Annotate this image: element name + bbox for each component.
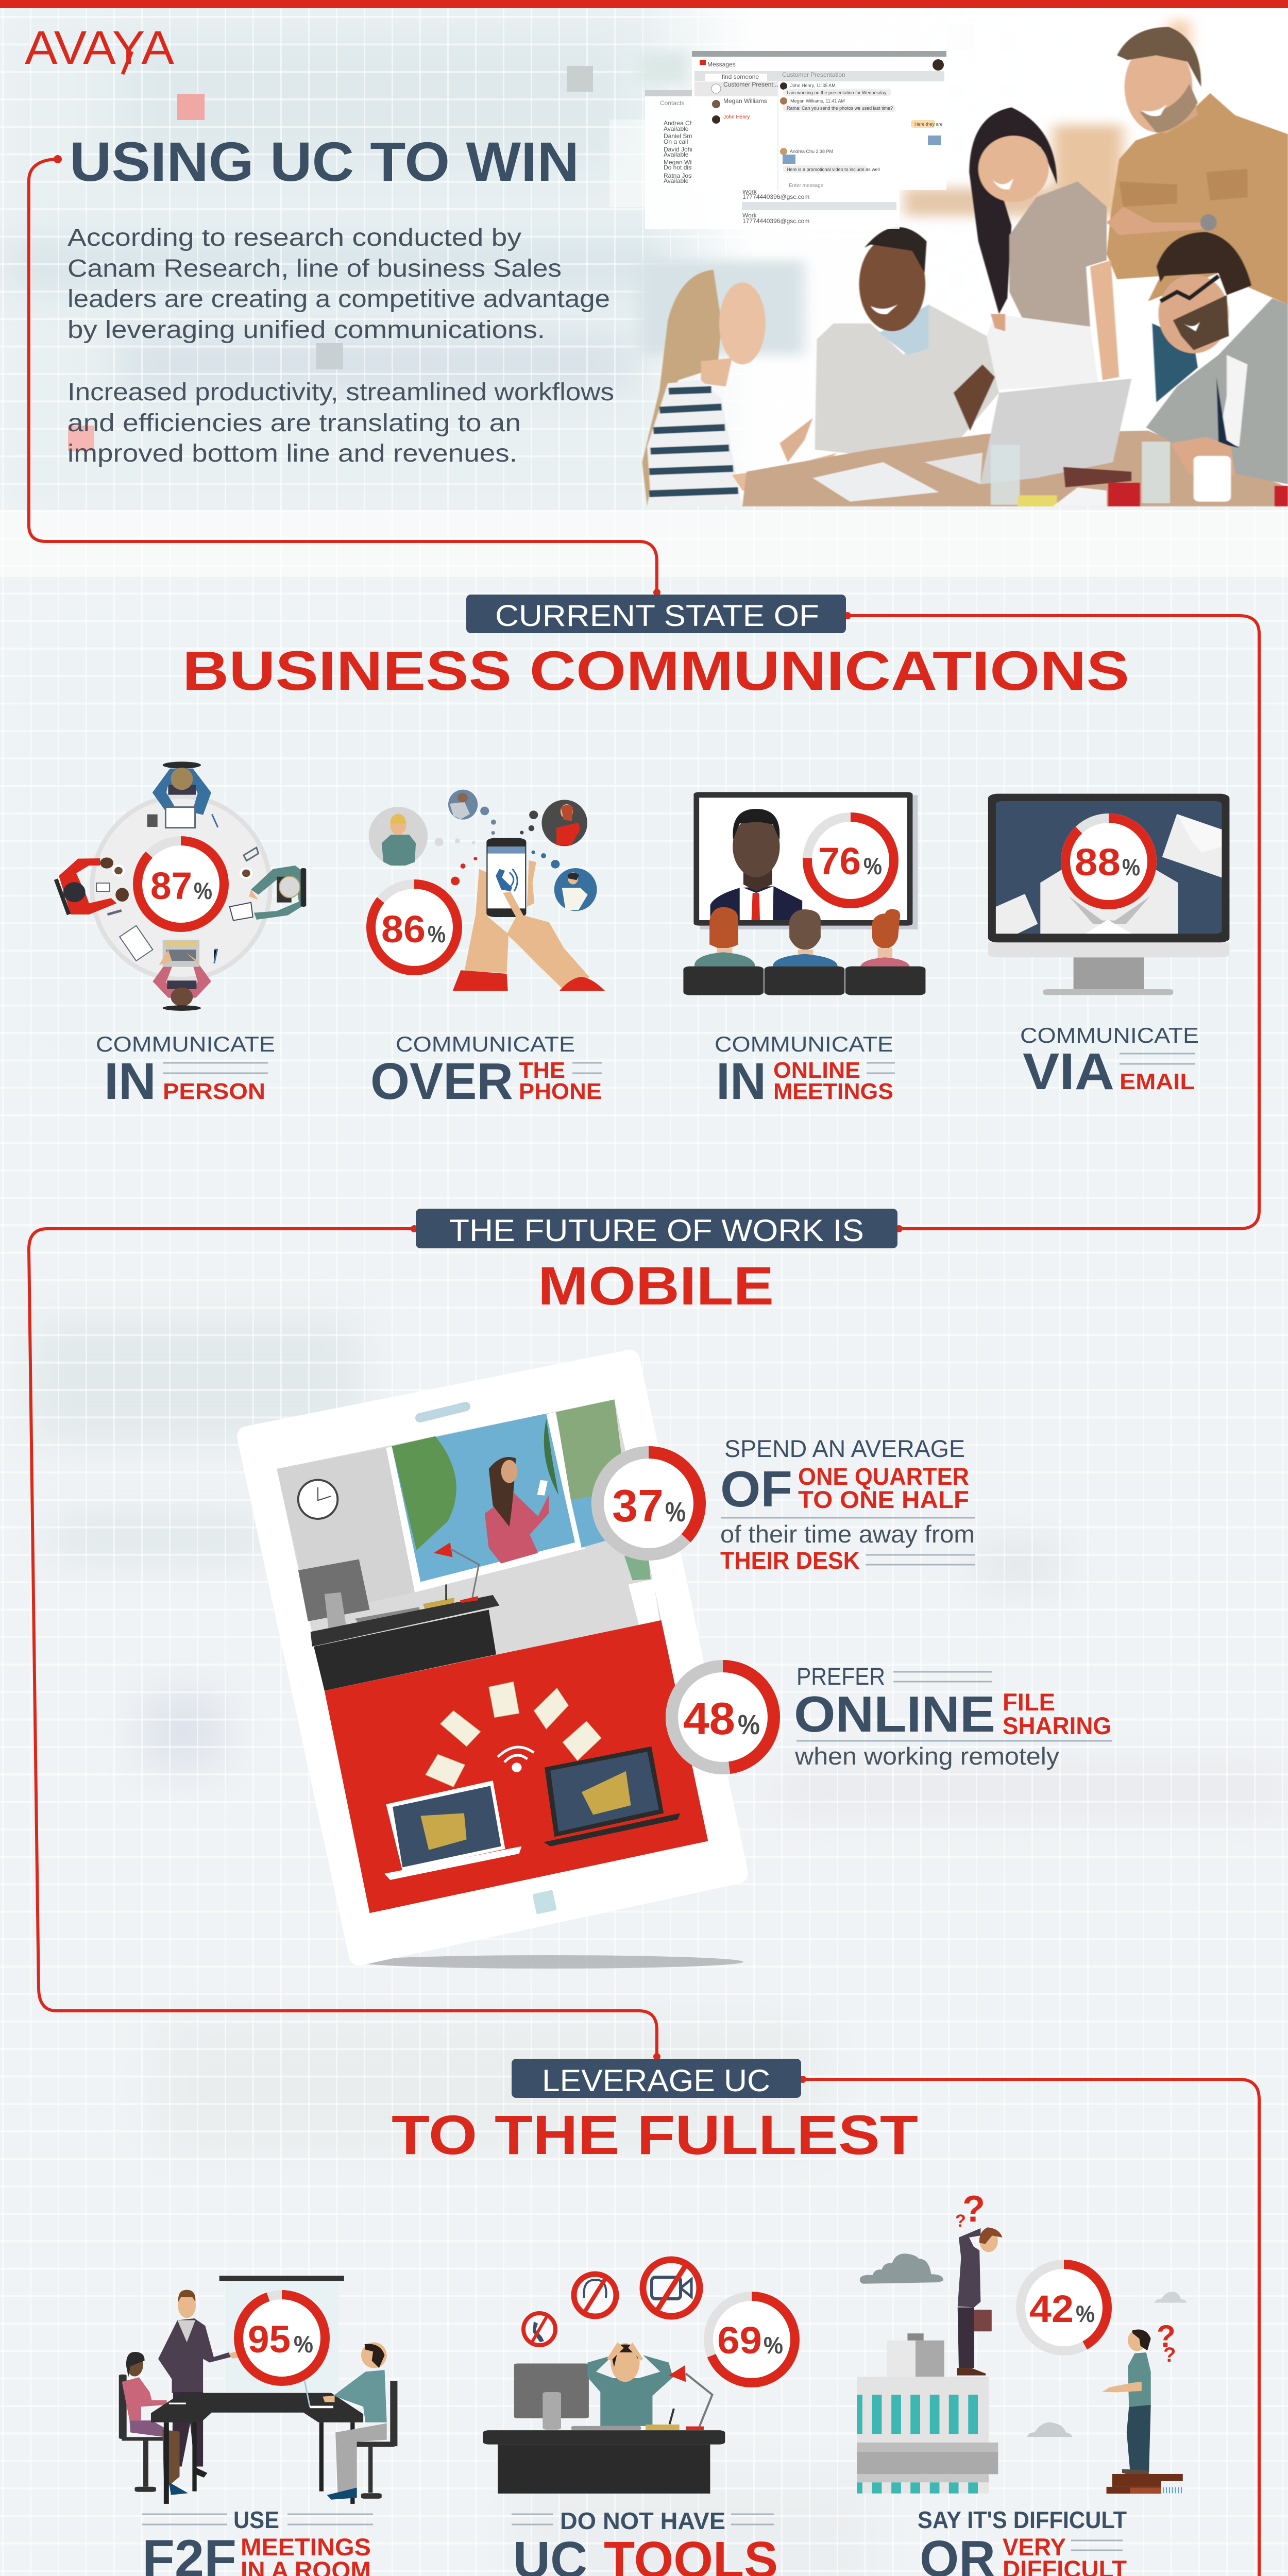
- gauge: 95 percent: %: [294, 2331, 313, 2358]
- section header: current state of: [466, 595, 846, 633]
- panel: contacts window behind: David Johnson: [664, 146, 704, 153]
- panel: messages window: Here is a promotional video to include as well: [787, 167, 880, 172]
- panel: contacts window behind: Available: [664, 125, 689, 132]
- gauge: 88 percent: [1061, 814, 1157, 909]
- gauge: 86 percent: [366, 879, 462, 975]
- gauge: 42 percent: %: [1076, 2300, 1095, 2327]
- section header: leverage uc: [512, 2059, 801, 2098]
- gauge: 87 percent: 87: [150, 865, 192, 907]
- icon: presentation screen and audience: [683, 792, 925, 995]
- gauge: 76 percent: %: [863, 853, 882, 879]
- text block: prefer online file sharing: FILE: [1003, 1688, 1055, 1716]
- text block: intro paragraph 1: leaders are creating a competitive advantage: [67, 285, 610, 313]
- label: communicate over the phone: OVER: [370, 1053, 513, 1110]
- heading: to the fullest: TO THE FULLEST: [392, 2104, 918, 2166]
- label: communicate in online meetings: ONLINE: [773, 1058, 860, 1083]
- text block: spend an average: [720, 1435, 975, 1574]
- gauge: 48 percent: [666, 1660, 780, 1774]
- gauge: 37 percent: [591, 1446, 706, 1561]
- gauge: 76 percent: 76: [818, 840, 861, 883]
- tablet home controls: [420, 1406, 557, 1914]
- panel: messages window: Andrea Chu 2:38 PM: [790, 149, 833, 154]
- gauge: 95 percent: [234, 2290, 330, 2386]
- label: communicate over the phone: [370, 1032, 602, 1110]
- panel: contacts window behind: Available: [664, 151, 689, 158]
- panel: contacts window behind: Available: [664, 177, 689, 184]
- panel: do not have uc tools: [470, 2260, 813, 2576]
- hero photo: team around laptop with UC windows: [609, 8, 1288, 506]
- icon: monitor with envelopes: [988, 794, 1229, 995]
- text block: intro paragraph 2: [67, 379, 614, 467]
- panel: communicate in online meetings: [683, 792, 925, 1110]
- text block: spend an average: OF: [720, 1461, 792, 1517]
- panel: contacts window behind: Contacts: [660, 99, 684, 107]
- text block: intro paragraph 2: and efficiencies are translating to an: [67, 410, 521, 437]
- panel: contacts window behind: Work: [742, 188, 757, 195]
- icon: no video: [643, 2260, 700, 2316]
- panel: communicate over the phone: [366, 790, 605, 1110]
- text block: prefer online file sharing: [794, 1663, 1112, 1770]
- heading: mobile: MOBILE: [538, 1256, 774, 1316]
- gauge: 87 percent: %: [194, 877, 212, 904]
- text block: intro paragraph 1: According to research conducted by: [67, 224, 521, 251]
- panel: messages window: Here they are: [914, 122, 943, 127]
- text block: spend an average: SPEND AN AVERAGE: [724, 1435, 965, 1462]
- text block: intro paragraph 1: [67, 224, 610, 344]
- gauge: 69 percent: 69: [717, 2319, 762, 2362]
- text block: intro paragraph 2: improved bottom line and revenues.: [67, 440, 517, 467]
- label: communicate in person: [96, 1032, 275, 1110]
- panel: messages window: [692, 51, 946, 190]
- label: communicate via email: VIA: [1023, 1043, 1114, 1100]
- panel: contacts window behind: Daniel Smith: [664, 132, 699, 140]
- tablet body: [247, 1360, 738, 1955]
- gauge: 42 percent: [1016, 2260, 1112, 2355]
- section header: future of work: THE FUTURE OF WORK IS: [449, 1213, 864, 1248]
- panel: messages window: Customer Presentation: [782, 71, 845, 78]
- panel: communicate via email: [988, 794, 1229, 1100]
- gauge: 48 percent: %: [738, 1709, 760, 1740]
- panel: messages window: Messages: [707, 61, 736, 68]
- panel: messages window: I am working on the presentation for Wednesday: [787, 90, 887, 95]
- panel: messages window: Megan Williams: [723, 97, 767, 105]
- label: communicate in online meetings: IN: [716, 1053, 766, 1110]
- icon: no headset: [574, 2274, 616, 2316]
- section header: leverage uc: LEVERAGE UC: [542, 2063, 770, 2098]
- gauge: 87 percent: [133, 836, 229, 932]
- logo: Avaya top: AVAYA: [25, 22, 175, 74]
- panel: difficult to collaborate: [857, 2189, 1187, 2576]
- panel: messages window: Customer Present...: [723, 81, 778, 88]
- panel: contacts window behind: 17774440396@gsc.com: [742, 217, 809, 225]
- gauge: 86 percent: %: [428, 921, 446, 947]
- gauge: 42 percent: 42: [1029, 2287, 1074, 2330]
- label: communicate in online meetings: [715, 1032, 895, 1110]
- label: communicate in person: IN: [104, 1053, 156, 1110]
- panel: messages window: Megan Williams, 11:41 AM: [790, 98, 845, 104]
- label: communicate in online meetings: MEETINGS: [773, 1079, 893, 1104]
- label: communicate in person: PERSON: [163, 1079, 265, 1104]
- panel: contacts window behind: Ratna Joshi: [664, 172, 696, 179]
- label: do not have uc tools: DO NOT HAVE: [560, 2507, 725, 2534]
- panel: contacts window behind: [609, 90, 900, 229]
- icon: meeting room: [119, 2276, 397, 2504]
- text block: intro paragraph 2: Increased productivity, streamlined workflows: [67, 379, 614, 406]
- tablet shadow: [357, 1955, 743, 1969]
- gauge: 76 percent: [803, 812, 899, 908]
- icon: stressed man at desk: [483, 2342, 725, 2494]
- icon: no phone: [523, 2313, 555, 2345]
- icon: meeting table from above: [56, 761, 306, 1011]
- gauge: 69 percent: [704, 2292, 800, 2387]
- gauge: 95 percent: 95: [248, 2318, 291, 2361]
- text block: spend an average: of their time away from: [720, 1520, 975, 1548]
- gauge: 37 percent: 37: [612, 1480, 664, 1531]
- icon: people: [642, 27, 1288, 506]
- panel: messages window: Ratna: Can you send the photos we used last time?: [787, 106, 893, 111]
- panel: messages window: John Henry: [723, 114, 750, 120]
- heading: business communications: BUSINESS COMMUNICATIONS: [182, 639, 1129, 702]
- label: communicate via email: [1020, 1023, 1199, 1100]
- label: difficult to collaborate: SAY IT'S DIFFICULT: [918, 2506, 1127, 2533]
- label: communicate over the phone: THE: [519, 1058, 565, 1083]
- panel: face to face meetings: [115, 2276, 402, 2576]
- panel: contacts window behind: Megan Williams: [664, 159, 707, 166]
- title: USING UC TO WIN: [70, 130, 579, 193]
- text block: spend an average: THEIR DESK: [720, 1547, 860, 1574]
- label: use f2f meetings: [115, 2506, 402, 2576]
- panel: contacts window behind: On a call: [664, 138, 688, 145]
- panel: messages window: John Henry, 11:35 AM: [790, 83, 836, 88]
- gauge: 48 percent: 48: [683, 1693, 735, 1744]
- panel: messages window: find someone: [722, 73, 759, 80]
- icon: question marks: ?: [1157, 2319, 1176, 2353]
- top red bar: [0, 0, 1288, 8]
- panel: contacts window behind: Do not disturb: [664, 164, 702, 171]
- label: use f2f meetings: MEETINGS: [241, 2533, 371, 2561]
- text block: prefer online file sharing: ONLINE: [794, 1686, 995, 1742]
- text block: prefer online file sharing: PREFER: [796, 1663, 885, 1690]
- panel: contacts window behind: Andrea Chu: [664, 120, 697, 127]
- label: difficult to collaborate: [917, 2506, 1127, 2576]
- label: communicate in person: COMMUNICATE: [96, 1032, 275, 1056]
- label: communicate via email: COMMUNICATE: [1020, 1023, 1199, 1047]
- label: communicate over the phone: PHONE: [519, 1079, 602, 1104]
- panel: messages window: Enter message: [789, 183, 824, 189]
- illustration: tilted tablet: [247, 1360, 743, 1969]
- gauge: 69 percent: %: [764, 2332, 783, 2359]
- section header: current state of: CURRENT STATE OF: [495, 599, 819, 633]
- panel: contacts window behind: Work: [742, 212, 757, 219]
- text block: intro paragraph 1: by leveraging unified communications.: [67, 316, 545, 344]
- gauge: 37 percent: %: [665, 1497, 686, 1528]
- label: communicate via email: EMAIL: [1120, 1069, 1195, 1094]
- label: communicate over the phone: COMMUNICATE: [396, 1032, 575, 1056]
- label: difficult to collaborate: VERY: [1003, 2533, 1066, 2561]
- panel: communicate in person: [56, 761, 306, 1110]
- gauge: 88 percent: 88: [1075, 841, 1121, 884]
- text block: spend an average: TO ONE HALF: [798, 1486, 969, 1513]
- icon: question marks: ?: [1163, 2344, 1176, 2366]
- label: do not have uc tools: [470, 2507, 813, 2576]
- icon: hands with phone and callers: [369, 790, 605, 991]
- icon: question marks: ?: [962, 2189, 985, 2230]
- label: use f2f meetings: USE: [233, 2506, 279, 2533]
- gauge: 88 percent: %: [1122, 854, 1140, 880]
- panel: contacts window behind: 17774440396@gsc.com: [742, 193, 809, 200]
- text block: prefer online file sharing: when working remotely: [794, 1742, 1060, 1770]
- gauge: 86 percent: 86: [381, 908, 426, 951]
- icon: question marks: [955, 2189, 1176, 2366]
- icon: question marks: ?: [955, 2211, 966, 2231]
- label: communicate in online meetings: COMMUNICATE: [715, 1032, 893, 1056]
- text block: intro paragraph 1: Canam Research, line of business Sales: [67, 255, 562, 282]
- text block: spend an average: ONE QUARTER: [798, 1463, 969, 1490]
- tablet screen scenes: [277, 1399, 708, 1913]
- icon: man on building and man on books: [857, 2227, 1187, 2494]
- text block: prefer online file sharing: SHARING: [1003, 1712, 1111, 1739]
